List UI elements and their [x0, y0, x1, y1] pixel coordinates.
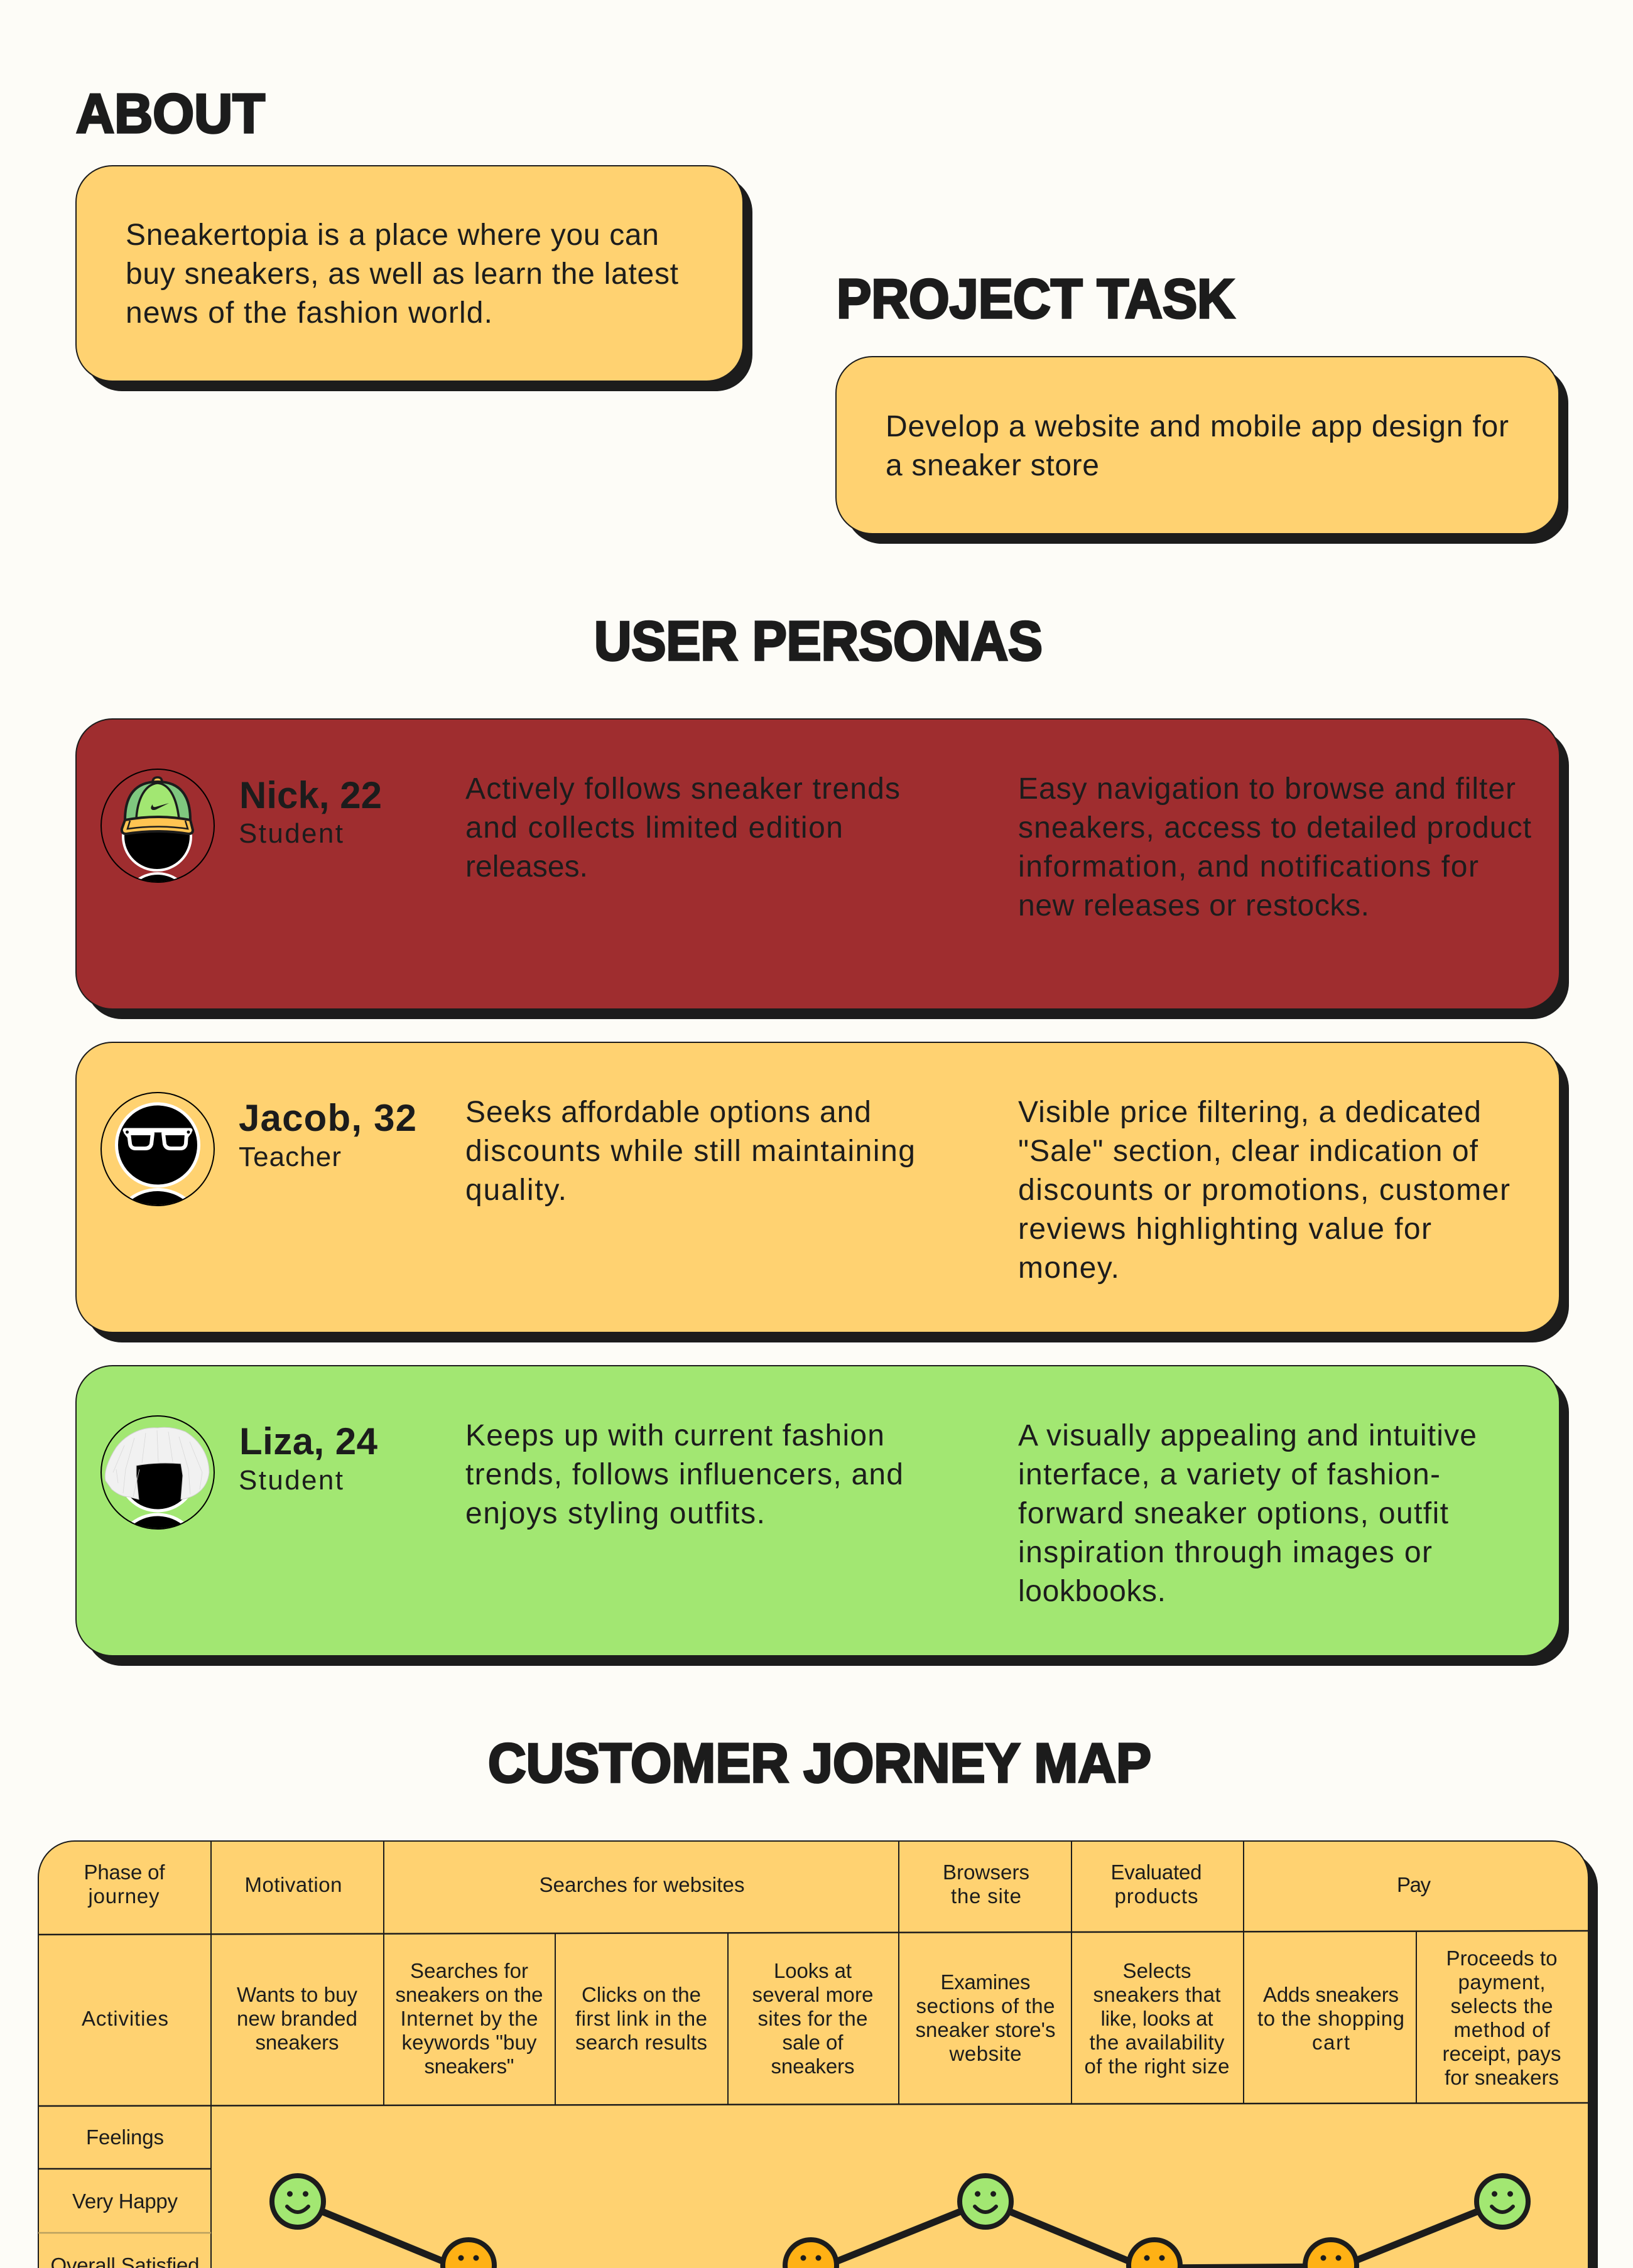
row: activities: method of [1453, 2018, 1550, 2041]
row: activities: sneakers [771, 2055, 854, 2078]
panel: persona Nick [76, 719, 1569, 1019]
text: Liza needs: lookbooks. [1018, 1575, 1166, 1608]
heading: user personas: USER PERSONAS [594, 610, 1043, 672]
row: activities: to the shopping [1257, 2007, 1404, 2030]
panel: about [76, 166, 752, 391]
row: activities: cart [1312, 2031, 1350, 2054]
text: Liza name and role [239, 1420, 378, 1496]
row: activities: like, looks at [1100, 2007, 1213, 2030]
text: project description: a sneaker store [886, 449, 1099, 482]
row: activities: for sneakers [1445, 2066, 1559, 2089]
text: Liza needs: A visually appealing and intuitive [1018, 1419, 1477, 1452]
icon: satisfied face 2 [443, 2240, 494, 2268]
heading: project task: PROJECT TASK [837, 267, 1235, 330]
row: activities: search results [575, 2031, 707, 2054]
icon: Jacob avatar with glasses [100, 1092, 215, 1206]
text: Nick name and role: Student [239, 818, 343, 849]
text: about description [126, 219, 678, 330]
row: activities: sneaker store's [916, 2018, 1055, 2041]
row: phase of journey: products [1114, 1884, 1198, 1908]
icon: Liza avatar with white bob hair [100, 1415, 215, 1530]
panel: persona Jacob [76, 1042, 1569, 1342]
text: Jacob name and role: Teacher [239, 1142, 341, 1172]
row: activities: Searches for [410, 1959, 528, 1982]
card: Jacob background [76, 1042, 1569, 1342]
row labels: feelings scale: Feelings [86, 2125, 164, 2149]
text: Jacob needs: discounts or promotions, customer [1018, 1174, 1510, 1207]
text: Jacob needs: reviews highlighting value for [1018, 1212, 1431, 1246]
row: activities: Adds sneakers [1263, 1983, 1399, 2006]
row: activities: Selects [1123, 1959, 1191, 1982]
text: Liza behaviour: enjoys styling outfits. [465, 1497, 765, 1530]
row: activities: Examines [941, 1970, 1030, 1994]
table grid lines [38, 1842, 1588, 2268]
row: activities: Wants to buy [237, 1983, 358, 2006]
row: phase of journey [84, 1860, 1431, 1908]
row labels: feelings scale [50, 2125, 200, 2268]
text: Liza needs: interface, a variety of fashion- [1018, 1458, 1440, 1491]
row: activities: keywords "buy [402, 2031, 537, 2054]
text: Nick name and role [239, 774, 382, 849]
row: activities: sneakers that [1093, 1983, 1221, 2006]
card: project background [836, 357, 1568, 544]
text: about description: buy sneakers, as well as learn the latest [126, 257, 678, 291]
text: Jacob behaviour [465, 1096, 915, 1207]
row: phase of journey: Phase of [84, 1860, 165, 1884]
icon: very happy face 7 [1477, 2176, 1528, 2227]
row: activities: first link in the [575, 2007, 707, 2030]
icon: satisfied face 3 [785, 2240, 837, 2268]
text: Liza behaviour: Keeps up with current fashion [465, 1419, 884, 1452]
text: Jacob behaviour: Seeks affordable options and [465, 1096, 871, 1129]
row: activities: new branded [237, 2007, 357, 2030]
row: activities: Looks at [774, 1959, 852, 1982]
text: about description: news of the fashion world. [126, 296, 492, 330]
text: Jacob behaviour: discounts while still maintaining [465, 1135, 915, 1168]
text: Nick behaviour [465, 772, 900, 883]
row: phase of journey: Motivation [245, 1873, 342, 1896]
text: Nick behaviour: releases. [465, 850, 588, 883]
icon: Nick avatar with green cap [100, 769, 215, 883]
icon: very happy face 4 [960, 2176, 1011, 2227]
text: Liza behaviour [465, 1419, 903, 1530]
icon: satisfied face 5 [1129, 2240, 1180, 2268]
text: Nick needs: information, and notifications for [1018, 850, 1478, 883]
row: phase of journey: Browsers [943, 1860, 1029, 1884]
text: Jacob name and role: Jacob, 32 [239, 1097, 416, 1139]
row: phase of journey: the site [951, 1884, 1021, 1908]
text: Liza needs: inspiration through images or [1018, 1536, 1432, 1569]
text: Jacob needs: "Sale" section, clear indication of [1018, 1135, 1478, 1168]
text: Nick needs [1018, 772, 1531, 922]
card: Nick background [76, 719, 1569, 1019]
row: phase of journey: Evaluated [1110, 1860, 1202, 1884]
row: activities: Clicks on the [582, 1983, 701, 2006]
text: Nick name and role: Nick, 22 [239, 774, 382, 816]
row: activities: receipt, pays [1442, 2042, 1561, 2065]
text: Jacob needs [1018, 1096, 1510, 1285]
row: activities: sneakers [255, 2031, 339, 2054]
row: activities: sneakers" [425, 2055, 514, 2078]
card: Liza background [76, 1366, 1569, 1666]
row: phase of journey: journey [88, 1884, 160, 1908]
row: activities: Proceeds to [1446, 1947, 1558, 1970]
row: activities: sites for the [757, 2007, 868, 2030]
row: activities: sale of [783, 2031, 844, 2054]
text: project description: Develop a website and mobile app design for [886, 410, 1509, 443]
row: phase of journey: Pay [1397, 1873, 1431, 1896]
row: activities: selects the [1451, 1994, 1553, 2017]
heading: about: ABOUT [76, 82, 265, 144]
row: activities: Activities [82, 2007, 168, 2030]
row labels: feelings scale: Very Happy [72, 2190, 178, 2213]
text: Liza behaviour: trends, follows influencers, and [465, 1458, 903, 1491]
text: Nick needs: sneakers, access to detailed product [1018, 811, 1531, 845]
text: Liza name and role: Liza, 24 [239, 1420, 378, 1462]
text: Nick behaviour: Actively follows sneaker trends [465, 772, 900, 806]
row: activities: website [948, 2042, 1021, 2065]
text: about description: Sneakertopia is a place where you can [126, 219, 659, 252]
text: Nick behaviour: and collects limited edition [465, 811, 843, 845]
text: Jacob needs: money. [1018, 1251, 1119, 1285]
row: phase of journey: Searches for websites [539, 1873, 745, 1896]
panel: persona Liza [76, 1366, 1569, 1666]
text: Liza needs: forward sneaker options, outfit [1018, 1497, 1448, 1530]
text: Nick needs: new releases or restocks. [1018, 889, 1369, 922]
icon: very happy face 1 [272, 2176, 323, 2227]
text: Jacob needs: Visible price filtering, a dedicated [1018, 1096, 1481, 1129]
text: Jacob name and role [239, 1097, 416, 1172]
row: activities: payment, [1458, 1970, 1545, 1994]
text: Liza needs [1018, 1419, 1477, 1608]
icon: satisfied face 6 [1305, 2240, 1357, 2268]
line: feelings connectors [298, 2201, 1502, 2268]
card: table background [38, 1841, 1598, 2268]
row: activities: Internet by the [401, 2007, 538, 2030]
chart: feelings journey line [272, 2176, 1528, 2268]
row: activities: sneakers on the [396, 1983, 543, 2006]
panel: project task [836, 357, 1568, 544]
text: Nick needs: Easy navigation to browse and filter [1018, 772, 1516, 806]
text: Liza name and role: Student [239, 1465, 343, 1496]
text: project description [886, 410, 1509, 482]
heading: customer journey map: CUSTOMER JORNEY MAP [488, 1732, 1151, 1794]
row: activities: several more [752, 1983, 873, 2006]
row: activities: sections of the [916, 1994, 1055, 2017]
panel: customer journey map table [38, 1841, 1598, 2268]
text: Jacob behaviour: quality. [465, 1174, 567, 1207]
row: activities: the availability [1089, 2031, 1225, 2054]
row: activities [82, 1947, 1561, 2089]
card: about background [76, 166, 752, 391]
row: activities: of the right size [1084, 2055, 1230, 2078]
